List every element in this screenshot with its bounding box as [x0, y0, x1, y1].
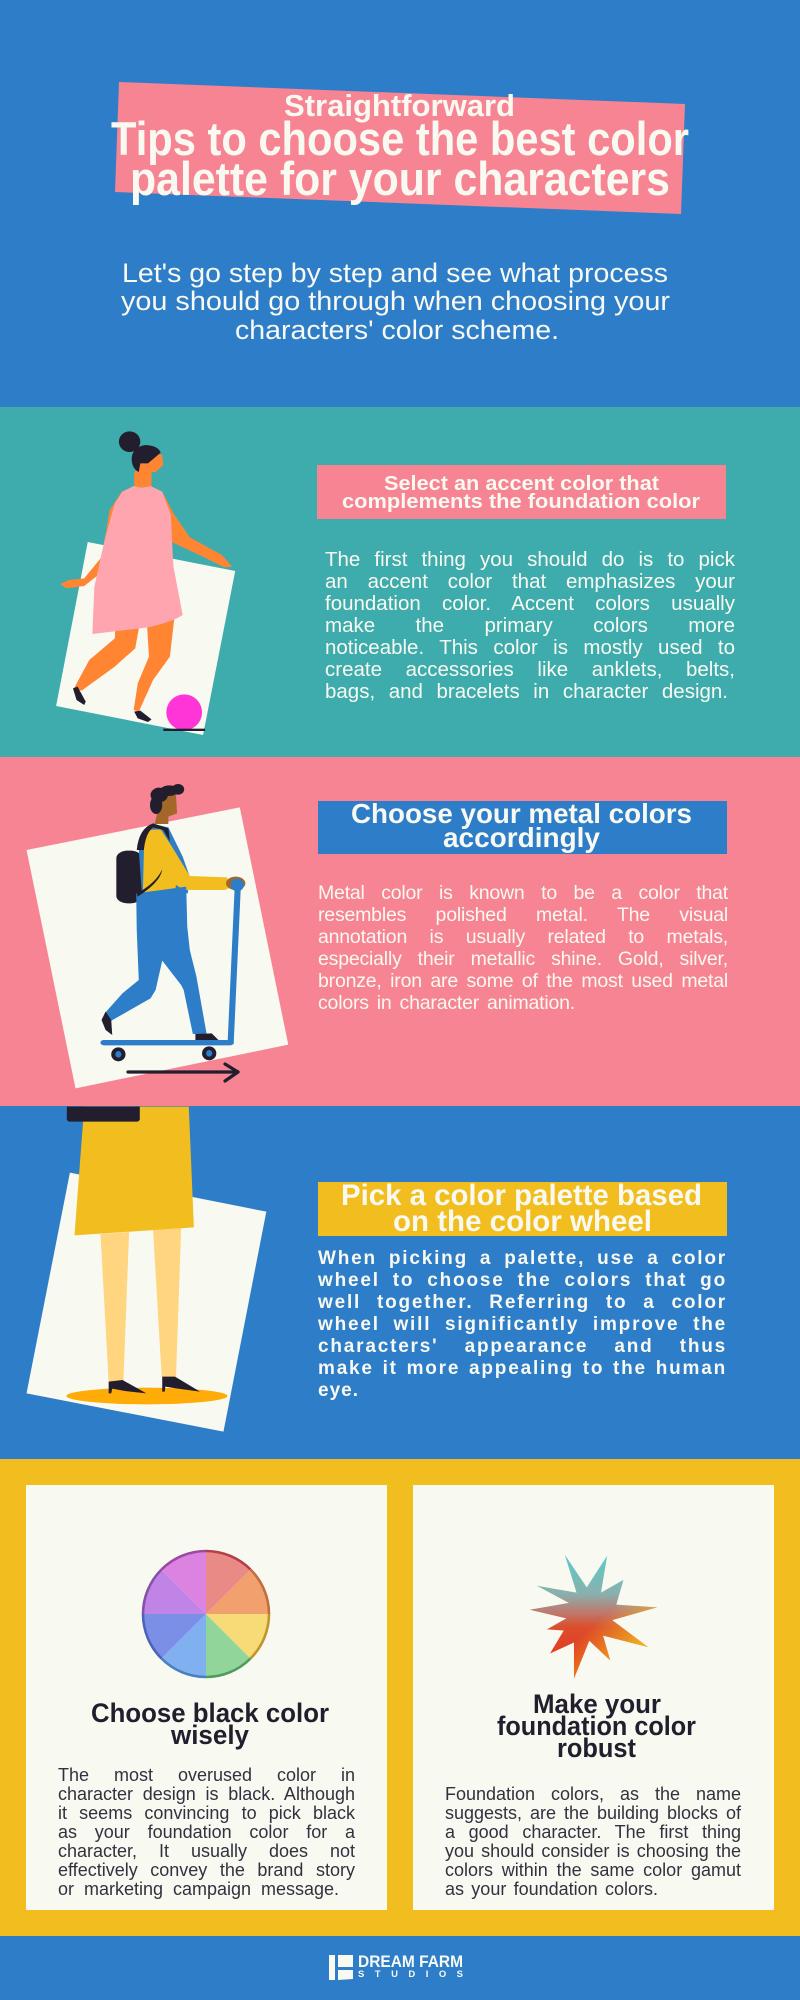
- illustration: person on scooter: [26, 784, 288, 1088]
- heading: metal colors: accordingly: [443, 822, 601, 853]
- body text: black color: [58, 1765, 355, 1899]
- body text: metal colors: annotation is usually related to metals,: [318, 926, 728, 948]
- heading: accent color: Select an accent color that: [384, 472, 659, 495]
- heading: foundation color: robust: [557, 1733, 636, 1763]
- heading: metal colors: Choose your metal colors: [351, 798, 692, 829]
- body text: foundation color: suggests, are the building blocks of: [445, 1803, 741, 1823]
- body text: black color: The most overused color in: [58, 1765, 355, 1785]
- body text: metal colors: especially their metallic shine. Gold, silver,: [318, 948, 728, 970]
- body text: foundation color: colors within the same color gamut: [445, 1860, 741, 1880]
- intro text: you should go through when choosing your: [121, 286, 670, 316]
- heading: foundation color: foundation color: [497, 1711, 696, 1741]
- title banner: Straightforward: [284, 88, 515, 123]
- heading: color wheel palette: [318, 1179, 727, 1238]
- body text: accent color: [325, 548, 735, 703]
- panel: footer: [0, 1936, 800, 2000]
- heading: black color: wisely: [170, 1720, 249, 1750]
- body text: black color: character, It usually does not: [58, 1841, 355, 1861]
- body text: foundation color: Foundation colors, as the name: [445, 1784, 741, 1804]
- card: black color: [26, 1485, 387, 1910]
- body text: metal colors: bronze, iron are some of the most used metal: [318, 970, 728, 992]
- panel: color wheel palette: [0, 1106, 800, 1459]
- panel: accent color: [0, 407, 800, 757]
- body text: accent color: bags, and bracelets in character design.: [325, 680, 728, 703]
- body text: accent color: make the primary colors more: [325, 614, 735, 637]
- body text: foundation color: you should consider is choosing the: [445, 1841, 741, 1861]
- icon: color wheel: [142, 1550, 270, 1678]
- heading: black color: Choose black color: [91, 1698, 329, 1728]
- title banner: palette for your characters: [130, 152, 670, 205]
- heading: color wheel palette: Pick a color palette based: [341, 1179, 702, 1212]
- logo: Dream Farm Studios: STUDIOS: [358, 1969, 463, 1980]
- illustration: woman in yellow skirt: [26, 1106, 266, 1432]
- body text: metal colors: [318, 882, 728, 1014]
- heading: foundation color: Make your: [533, 1689, 661, 1719]
- body text: color wheel palette: make it more appealing to the human: [318, 1358, 727, 1379]
- body text: foundation color: a good character. The first thing: [445, 1822, 741, 1842]
- body text: black color: character design is black. Although: [58, 1784, 355, 1804]
- heading: black color: [91, 1698, 329, 1750]
- body text: black color: as your foundation color for a: [58, 1822, 355, 1842]
- body text: black color: it seems convincing to pick black: [58, 1803, 355, 1823]
- heading: color wheel palette: on the color wheel: [393, 1205, 652, 1238]
- body text: color wheel palette: wheel to choose the colors that go: [318, 1270, 727, 1291]
- body text: accent color: noticeable. This color is mostly used to: [325, 636, 735, 659]
- intro text: Let's go step by step and see what process: [122, 258, 668, 288]
- body text: metal colors: colors in character animation.: [318, 992, 575, 1014]
- illustration: woman with ball: [56, 431, 236, 735]
- panel: header: [0, 0, 800, 407]
- body text: color wheel palette: eye.: [318, 1380, 359, 1401]
- body text: foundation color: as your foundation colors.: [445, 1879, 658, 1899]
- title banner: [111, 82, 689, 214]
- body text: black color: effectively convey the brand story: [58, 1860, 355, 1880]
- panel: metal colors: [0, 757, 800, 1106]
- body text: foundation color: [445, 1784, 742, 1899]
- heading: accent color: [317, 465, 726, 519]
- icon: gradient star: [530, 1555, 657, 1678]
- body text: accent color: create accessories like anklets, belts,: [325, 658, 735, 681]
- body text: accent color: an accent color that emphasizes your: [325, 570, 735, 593]
- body text: color wheel palette: characters' appearance and thus: [318, 1336, 727, 1357]
- body text: metal colors: Metal color is known to be a color that: [318, 882, 728, 904]
- body text: metal colors: resembles polished metal. The visual: [318, 904, 728, 926]
- logo: Dream Farm Studios: [329, 1953, 463, 1980]
- heading: accent color: complements the foundation color: [342, 490, 700, 513]
- intro text: [121, 258, 670, 345]
- body text: color wheel palette: well together. Referring to a color: [318, 1292, 727, 1313]
- logo: Dream Farm Studios: DREAM FARM: [358, 1953, 463, 1971]
- body text: color wheel palette: When picking a palette, use a color: [318, 1248, 727, 1269]
- body text: color wheel palette: wheel will significantly improve the: [318, 1314, 727, 1335]
- body text: accent color: The first thing you should do is to pick: [325, 548, 735, 571]
- title banner: Tips to choose the best color: [111, 112, 689, 165]
- body text: black color: or marketing campaign message.: [58, 1879, 339, 1899]
- panel: tips cards: [0, 1459, 800, 1936]
- heading: foundation color: [497, 1689, 696, 1763]
- heading: metal colors: [318, 798, 727, 854]
- arrow: [128, 1064, 238, 1081]
- body text: color wheel palette: [318, 1248, 727, 1401]
- card: foundation color: [413, 1485, 774, 1910]
- body text: accent color: foundation color. Accent colors usually: [325, 592, 735, 615]
- intro text: characters' color scheme.: [235, 315, 559, 345]
